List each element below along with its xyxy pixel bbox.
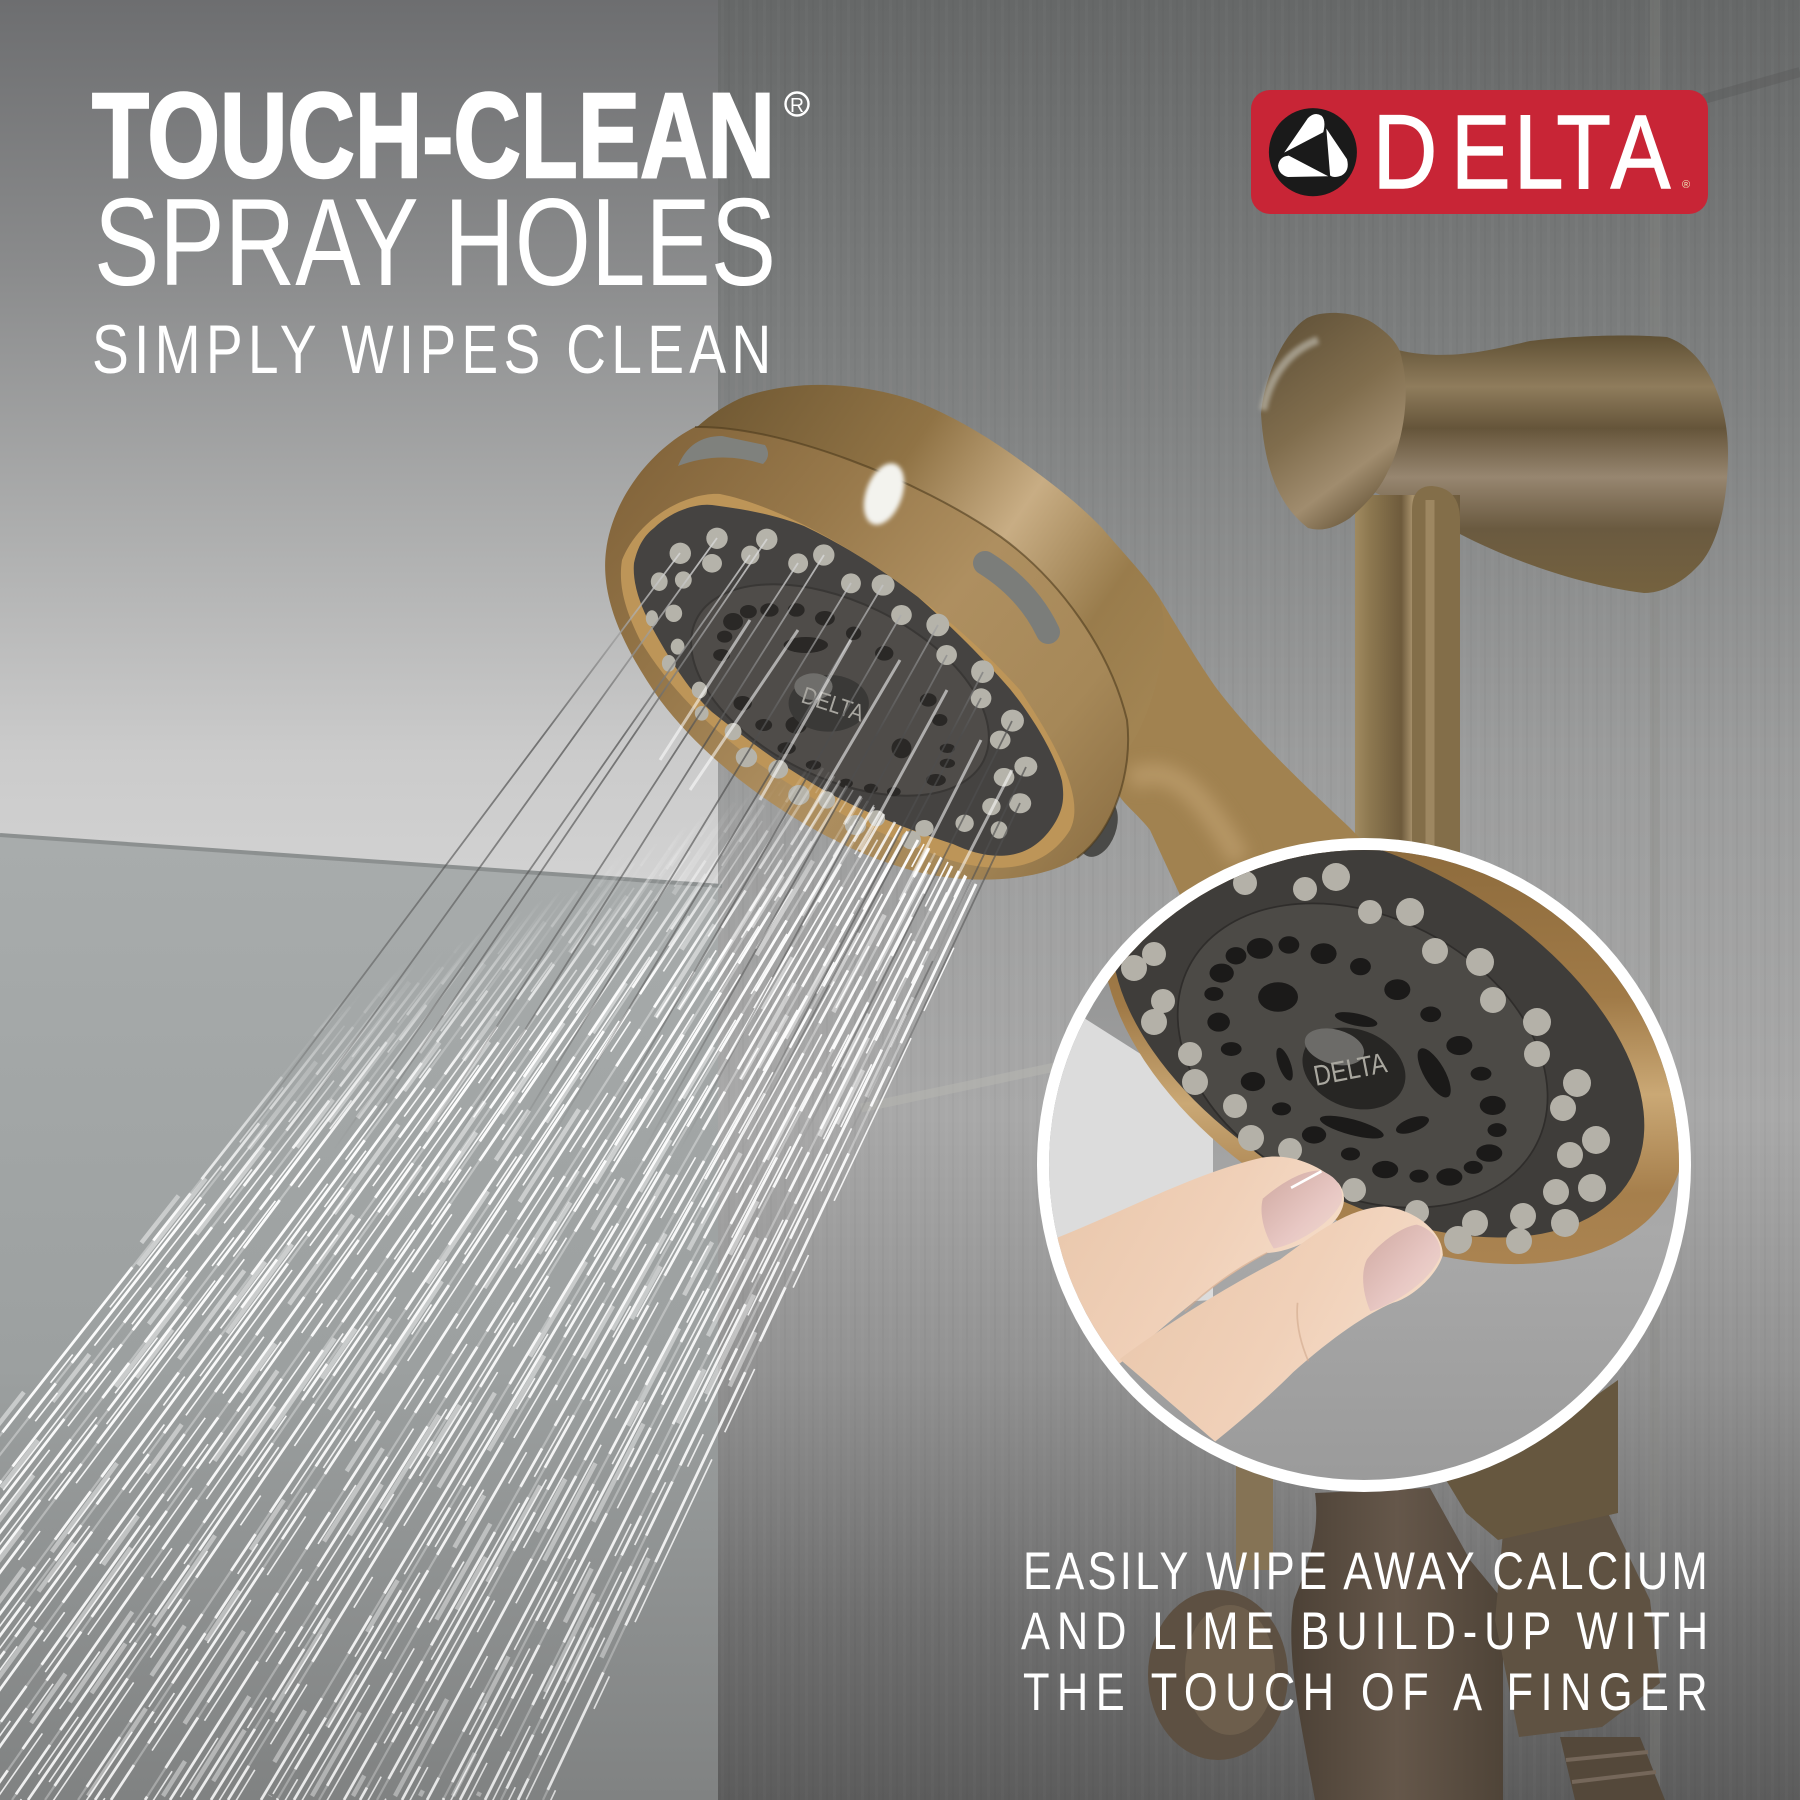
- background: left wall: [0, 0, 722, 886]
- dark spray face: [634, 505, 1063, 856]
- logo symbol: [1269, 108, 1357, 196]
- inner plate: [658, 541, 1022, 839]
- secondary broken streaks: [0, 630, 982, 1800]
- Delta logo: [1251, 90, 1708, 214]
- inset plate with holes: DELTA: [1311, 1047, 1390, 1093]
- callout text: [1021, 1542, 1708, 1722]
- round wall knob: [1148, 1590, 1288, 1760]
- logo badge: [1251, 90, 1708, 214]
- white ring: [1037, 838, 1691, 1492]
- middle finger: [1120, 1206, 1443, 1442]
- handle neck: [1100, 528, 1440, 960]
- soft continuous stream body: [0, 626, 976, 1800]
- spray holes and nozzles: [646, 528, 1037, 849]
- rubber button: [1071, 794, 1125, 862]
- subtitle: SIMPLY WIPES CLEAN: [92, 311, 771, 388]
- water spray: [0, 538, 1026, 1800]
- inset: finger wiping nozzles: [1037, 838, 1691, 1492]
- registered mark: [786, 92, 808, 117]
- hose with ribs: [1560, 1737, 1665, 1800]
- thin streams leaving the nozzles: [0, 538, 1026, 1800]
- vertical bar: [1355, 495, 1460, 885]
- inset center badge: [1302, 1028, 1406, 1110]
- title line: Touch-Clean: TOUCH-CLEAN: [92, 67, 775, 203]
- cradle piece: [1440, 1380, 1618, 1540]
- wall bracket and holder: [1261, 313, 1728, 900]
- registered mark: R: [790, 95, 804, 117]
- bright long streaks: [0, 626, 976, 1800]
- wide soft splashes: [0, 622, 969, 1796]
- inset picture: [1049, 850, 1679, 1480]
- faucet brand badge text: DELTA: [798, 682, 867, 727]
- clamp: [1495, 1513, 1660, 1737]
- inset dark face: [1116, 850, 1644, 1238]
- index fingernail: [1261, 1170, 1342, 1249]
- middle fingernail: [1363, 1225, 1440, 1311]
- lower hardware: diverter and hose connector: [1148, 1380, 1665, 1800]
- background: shower floor: [0, 835, 722, 1800]
- inset nozzles: [1121, 863, 1610, 1254]
- logo registered mark: ®: [1682, 179, 1690, 191]
- fingers: [1046, 1156, 1443, 1442]
- diverter body: [1291, 1488, 1503, 1800]
- vent slots: [678, 436, 768, 466]
- hand shower head: [605, 385, 1440, 960]
- wall flange: [1370, 336, 1728, 593]
- index finger: [1046, 1156, 1344, 1363]
- callout line 1: EASILY WIPE AWAY CALCIUM: [1023, 1542, 1708, 1601]
- logo wordmark: DELTA: [1373, 93, 1670, 211]
- rim highlight: [856, 458, 912, 530]
- title: [92, 67, 808, 388]
- knob: [1261, 313, 1406, 530]
- callout line 3: THE TOUCH OF A FINGER: [1023, 1663, 1708, 1722]
- front rim: [605, 427, 1128, 880]
- dome back: [660, 385, 1164, 750]
- inset plate with holes: [1177, 902, 1548, 1208]
- rod: [1236, 1460, 1273, 1570]
- gold face ring lower lip: [621, 494, 1074, 868]
- inset head rim: [1108, 850, 1679, 1264]
- callout line 2: AND LIME BUILD-UP WITH: [1021, 1602, 1708, 1661]
- title line: Spray Holes: SPRAY HOLES: [94, 174, 776, 312]
